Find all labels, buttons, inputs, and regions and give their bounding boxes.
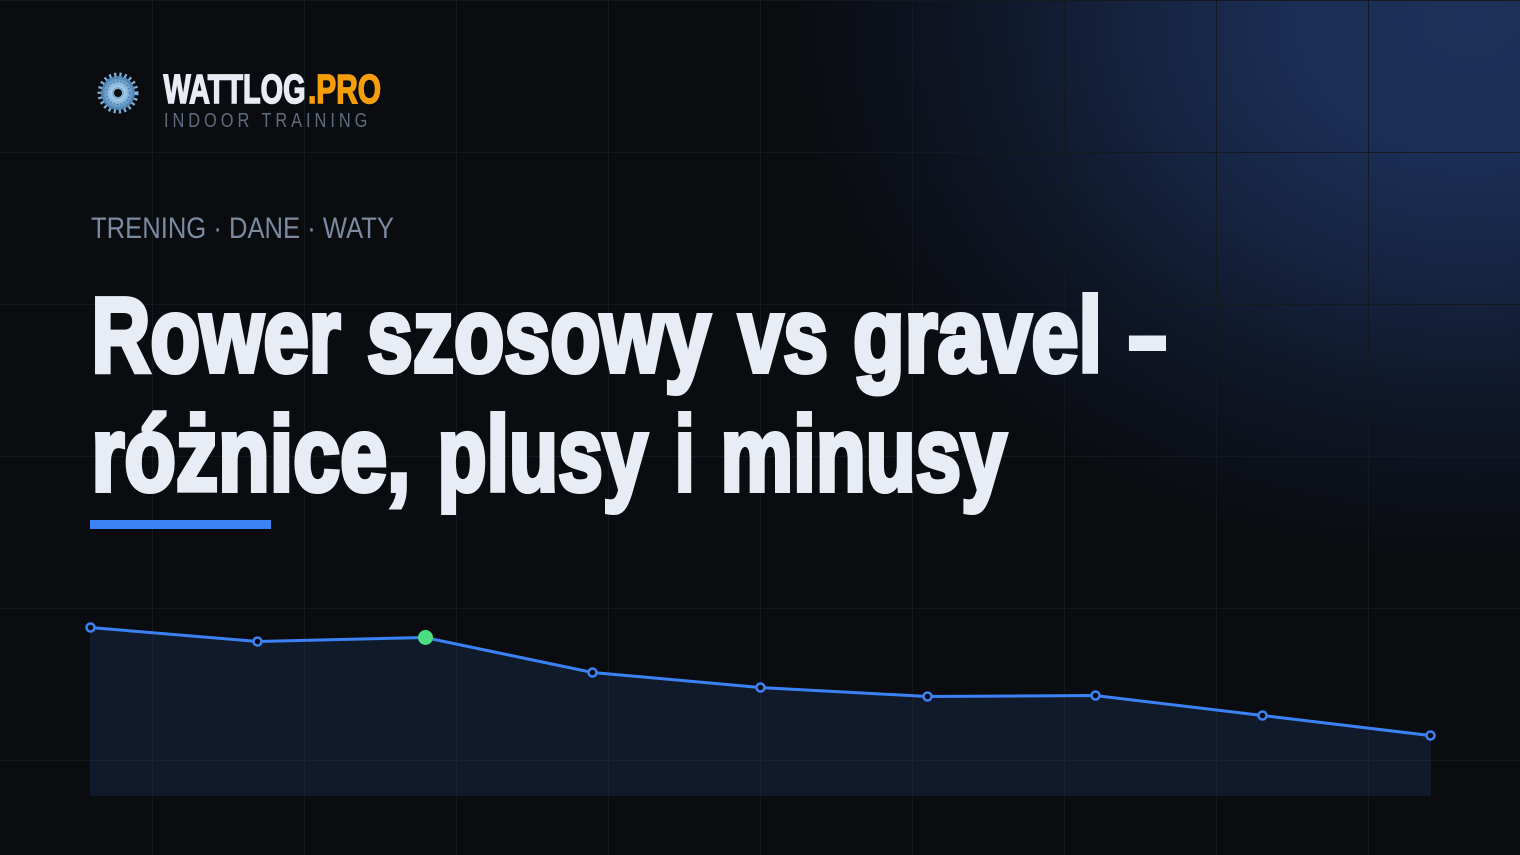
title: Rower: [92, 276, 340, 394]
grid lines over chart area: [90, 630, 1431, 796]
eyebrow: TRENING · DANE · WATY: [91, 212, 394, 245]
title: i: [675, 396, 694, 514]
title: szosowy: [367, 276, 711, 394]
chart line: [90, 628, 1430, 736]
icon: cassette cog: [100, 74, 136, 112]
title: –: [1128, 276, 1166, 394]
chart highlight point: [418, 630, 433, 645]
brand tagline: INDOOR TRAINING: [164, 108, 367, 131]
brand name: WATTLOG: [164, 66, 306, 112]
title: gravel: [853, 276, 1102, 394]
chart data points: [86, 624, 1434, 740]
line chart: power trend: [86, 624, 1434, 796]
title: [92, 276, 1166, 514]
title: plusy: [438, 396, 648, 514]
chart area fill: [90, 628, 1431, 796]
title: minusy: [720, 396, 1007, 514]
brand name: .PRO: [308, 66, 381, 112]
logo: brand lockup: [100, 66, 381, 131]
title accent underline: [90, 520, 271, 529]
title: różnice,: [92, 396, 410, 514]
title: vs: [738, 276, 828, 394]
